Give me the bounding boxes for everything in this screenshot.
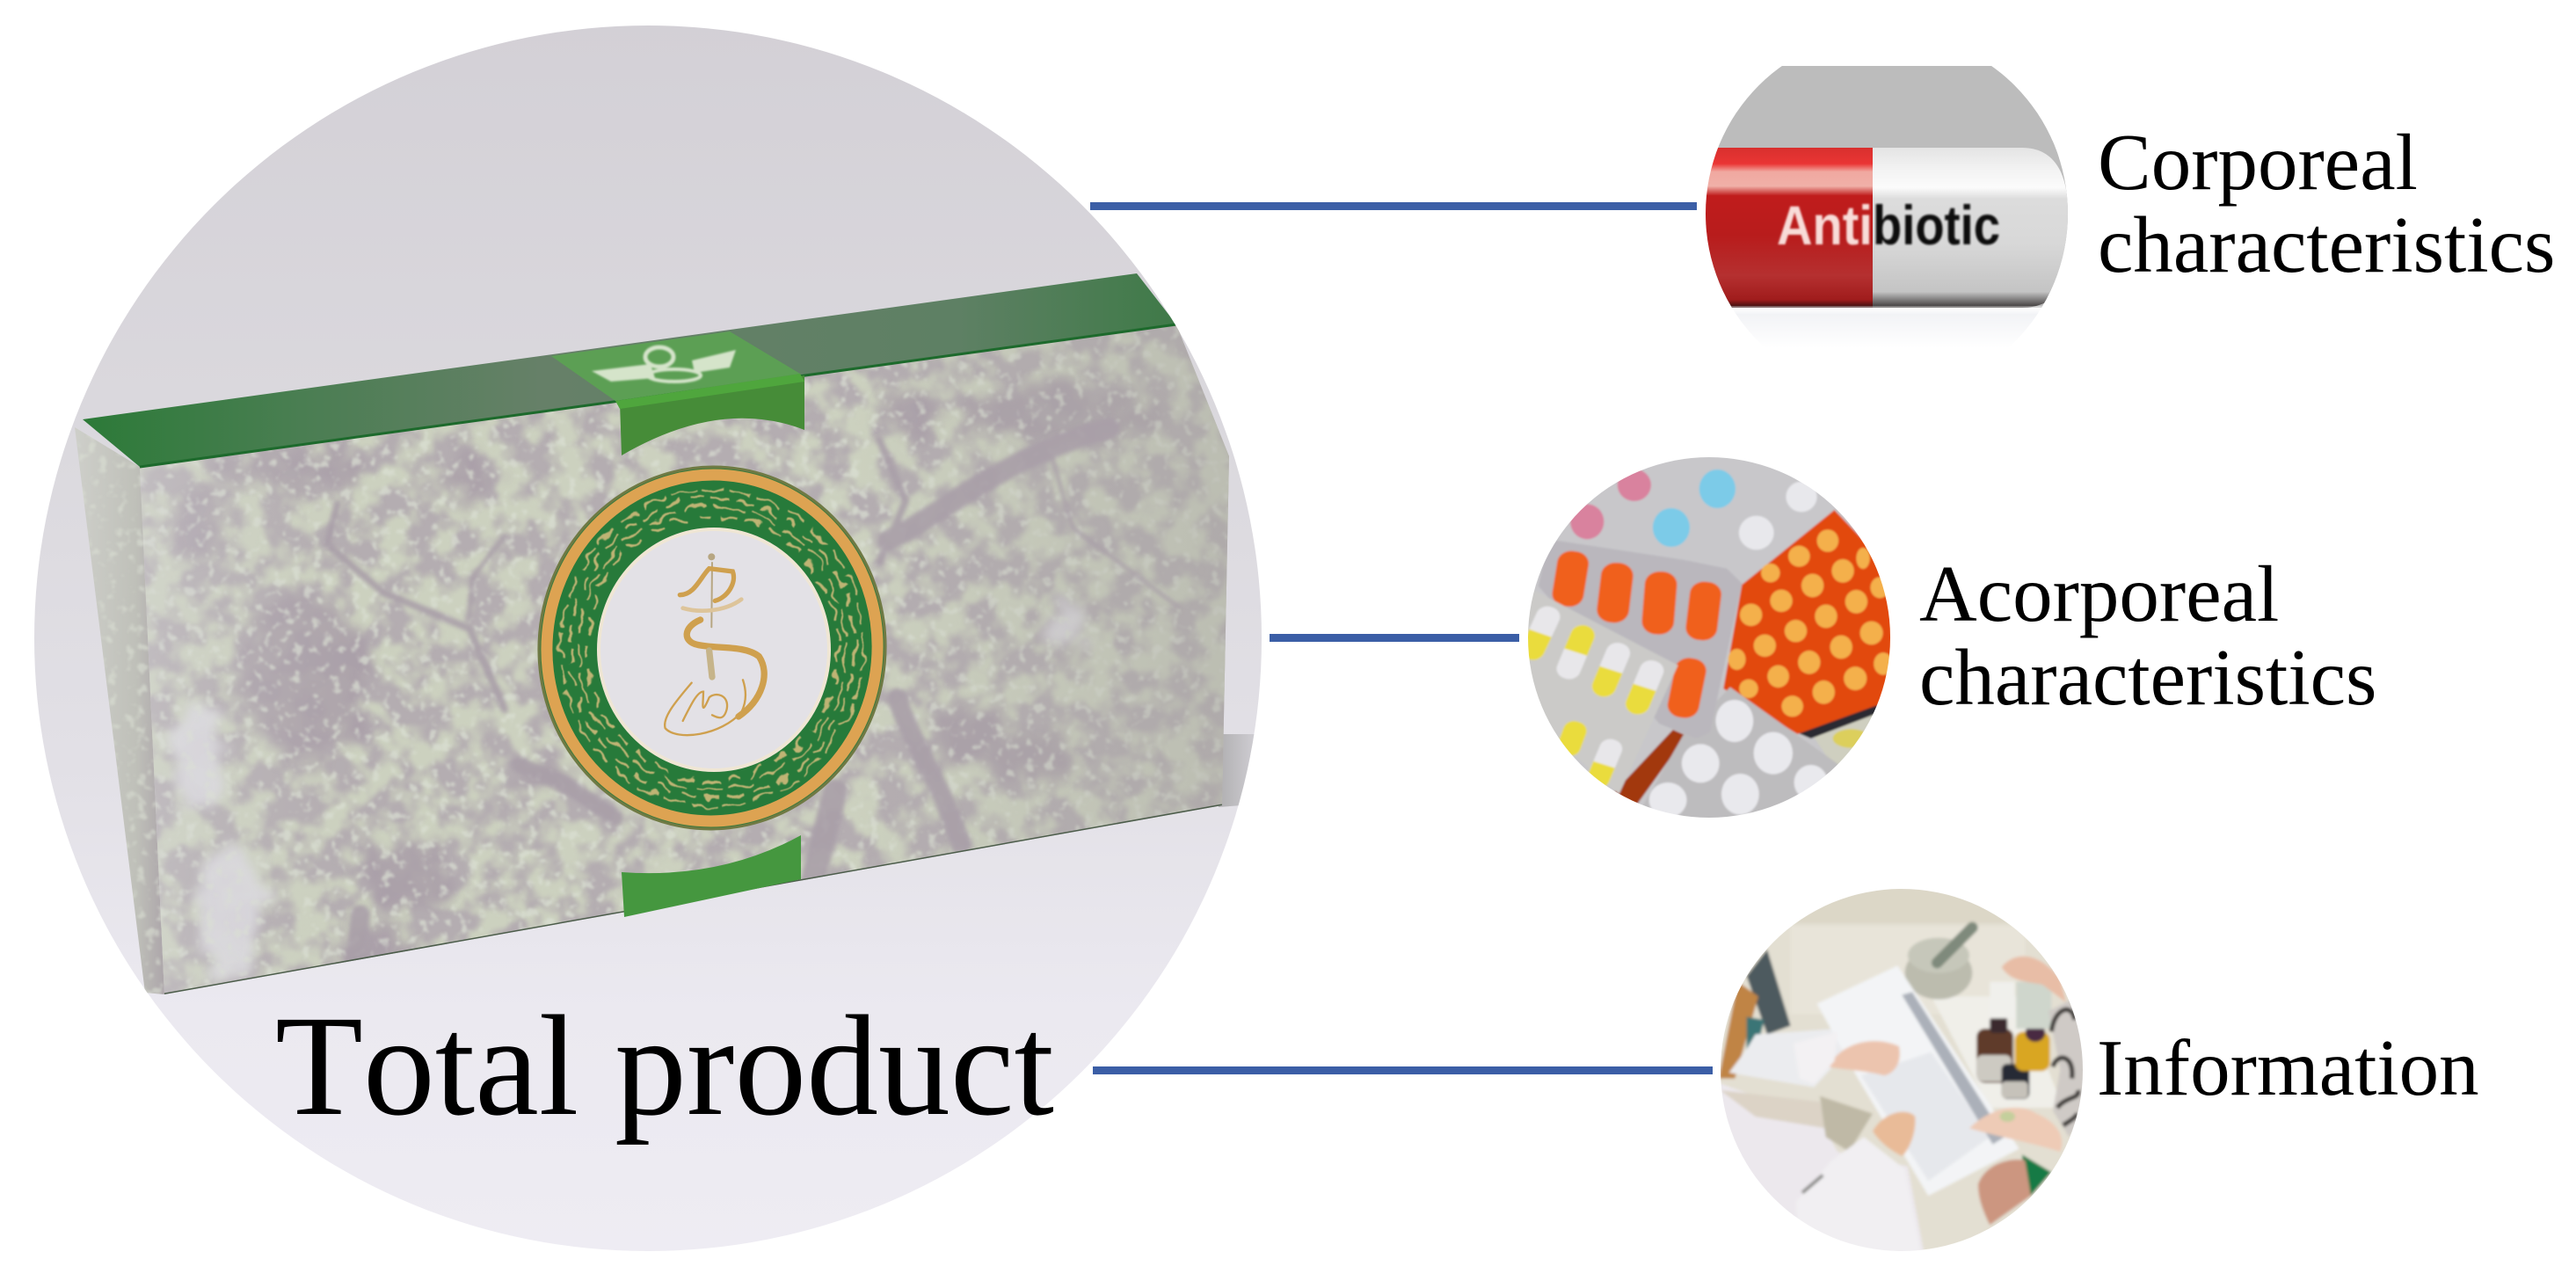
capsule reflection fade [1697,306,2075,348]
label: Acorporeal characteristics: Acorporeal [1919,550,2279,638]
dark panel on left [1747,950,1791,1035]
box bottom edge [164,805,1222,994]
connector line: corporeal [1090,202,1697,210]
skin knee [1978,1160,2031,1225]
teal clothing [1747,1017,1765,1055]
left hand on paper [1829,1041,1900,1075]
orange blister with yellow-orange pills [1723,510,1902,734]
box left flap [75,427,164,994]
box top green strip [83,273,1176,467]
photo background [26,18,1266,1257]
label: Acorporeal characteristics [1919,550,2376,722]
icon: blister packs of pills [1515,448,1905,829]
panel: total product photo circle [26,18,1266,1257]
orange strip on left [1719,982,1758,1079]
title: Total product: Total product [275,986,1054,1146]
shadow right of box [1219,734,1254,807]
green band lower front [622,835,801,917]
band highlight [615,374,804,409]
white coat of pharmacist [1714,1081,1925,1260]
capsule white half [1873,148,2068,308]
top grey blister with pink, blue and white pills [1515,448,1905,829]
medicine box [70,273,1240,1002]
emblem outer ring [537,466,887,830]
box front face with tree print [132,317,1240,1002]
mortar and pestle [1905,928,1972,1000]
emblem logo [665,553,764,735]
green band upper front [620,375,804,455]
capsule photo grey background [1697,66,2075,158]
label: Corporeal characteristics: characteristics [2098,200,2555,289]
connector line: information [1093,1066,1713,1074]
prescription document [1817,965,2019,1196]
band butterfly mark [592,347,736,382]
grey tone at sides of box [132,317,1240,1002]
white table right of paper [1932,996,2063,1108]
dark strip [1799,705,1878,739]
capsule label Anti: Anti [1777,195,1873,257]
emblem [537,466,887,830]
green clothing [2022,1154,2051,1196]
label: Information: Information [2097,1023,2479,1112]
tree branches [327,428,1178,994]
label: Corporeal characteristics [2098,118,2555,289]
capsule red half [1697,148,1873,308]
connector line: acorporeal [1270,634,1519,642]
lower hand holding pen [1873,1112,1915,1156]
yellow and white capsule blister [1515,580,1678,794]
icon: antibiotic capsule [1706,66,2068,327]
sleeve [1729,1029,1844,1088]
hair on right [2048,1000,2090,1137]
yellow pill corner [1811,708,1881,768]
white pills blister [1629,688,1841,829]
orange capsule blister [1539,539,1742,739]
icon: pharmacist consultation photo [1714,882,2092,1260]
table and wall [1714,882,2092,1260]
label: Corporeal characteristics: Corporeal [2098,118,2418,207]
white cuff [1794,1031,1837,1084]
green band on top [551,331,800,401]
medicine bottles [1976,982,2051,1099]
top right hand [2002,957,2066,1002]
right hand on paper [1969,1108,2062,1152]
orange strip lower [1612,730,1686,806]
emblem center disc [599,529,829,770]
emblem scroll ornament [561,490,863,806]
capsule label biotic: biotic [1873,195,2000,257]
label: Acorporeal characteristics: characteristics [1919,633,2376,722]
grey table under paper [1820,1096,1873,1152]
lower sleeve [1796,1137,1923,1260]
